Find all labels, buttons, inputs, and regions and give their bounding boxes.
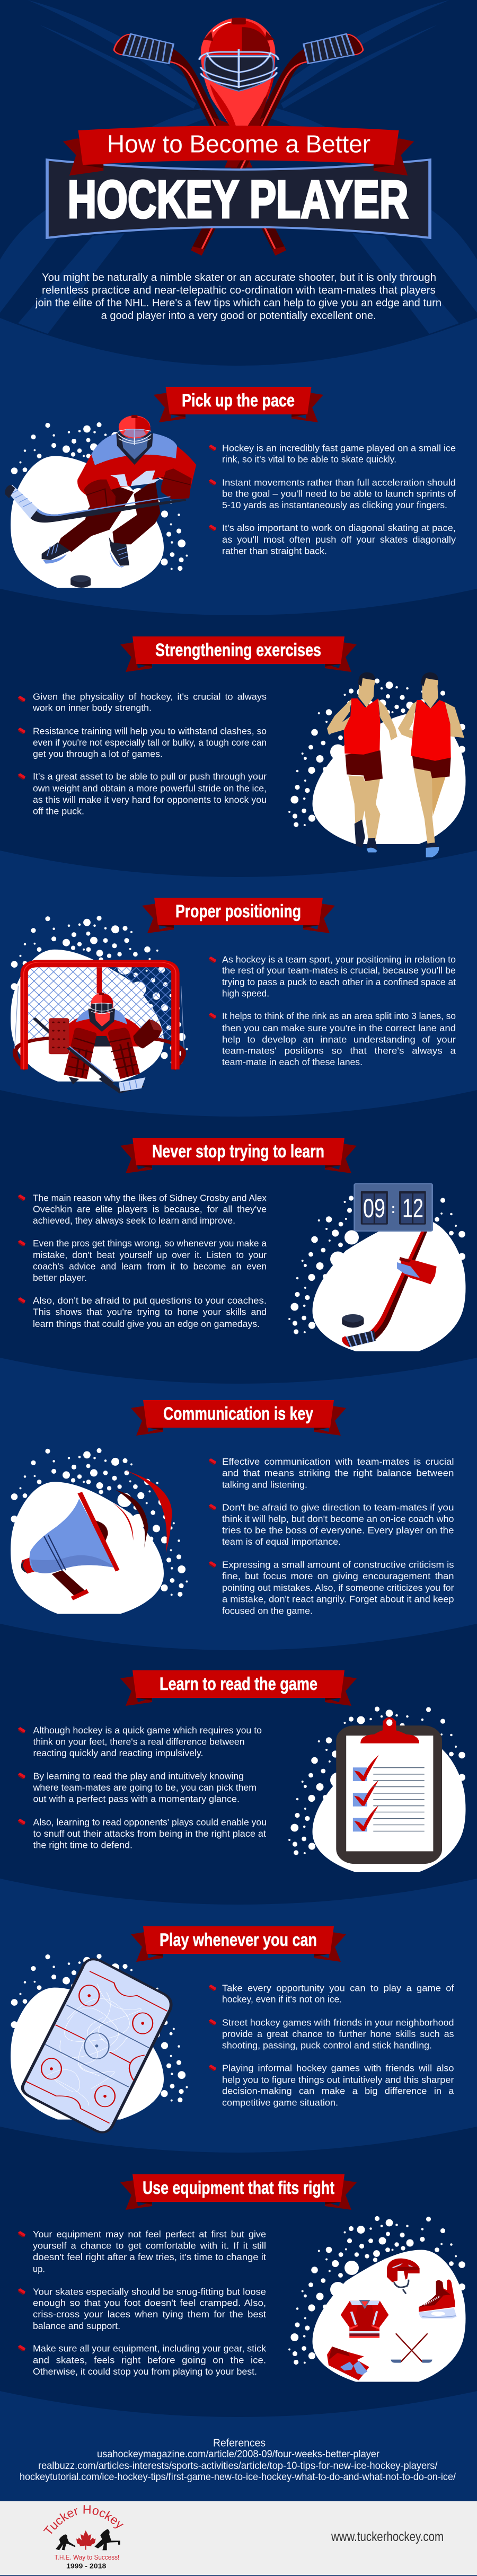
- title illustration: helmet and crossed sticks: [47, 18, 430, 255]
- text: Never stop trying to learn tips: mistake, don't beat yourself up over it. Listen to your: [33, 1250, 267, 1260]
- illustration: goalie in net: [11, 916, 188, 1092]
- text: Learn to read the game tips: reacting quickly and reacting impulsively.: [33, 1748, 204, 1758]
- heading ribbon: Proper positioning: Proper positioning: [175, 901, 301, 922]
- text: Never stop trying to learn tips: Ovechkin are elite players is because, for all they've: [33, 1204, 267, 1215]
- heading ribbon: Play whenever you can: [131, 1926, 346, 1962]
- logo: Tucker Hockey: 1999 - 2018: [66, 2562, 106, 2570]
- text: Learn to read the game tips: Also, learning to read opponents' plays could enable you: [33, 1817, 267, 1827]
- text: Use equipment that fits right tips: and skates, feels right before going on the ice.: [33, 2355, 266, 2366]
- text: Communication is key tips: Don't be afraid to give direction to team-mates if you: [222, 1502, 454, 1512]
- text: Learn to read the game tips: [18, 1725, 267, 1851]
- intro paragraph: a good player into a very good or potentially excellent one.: [101, 310, 376, 322]
- text: Proper positioning tips: As hockey is a team sport, your positioning in relation to: [222, 954, 456, 964]
- references: usahockeymagazine.com/article/2008-09/four-weeks-better-player: [97, 2449, 380, 2460]
- text: Never stop trying to learn tips: coach's advice and learn from it to become an even: [33, 1261, 267, 1271]
- footer panel: [0, 2501, 477, 2575]
- illustration: hockey equipment set: [288, 2216, 465, 2382]
- title line: How to Become a Better: How to Become a Better: [107, 130, 370, 158]
- text: Communication is key tips: talking and listening.: [222, 1479, 307, 1490]
- text: Communication is key tips: and that means striking the right balance between: [222, 1468, 454, 1479]
- text: Learn to read the game tips: Although hockey is a quick game which requires you to: [33, 1725, 262, 1736]
- illustration: skating hockey player: [5, 415, 196, 588]
- text: Proper positioning tips: [209, 954, 456, 1067]
- illustration: two runners: [288, 672, 465, 857]
- text: Proper positioning tips: high speed.: [222, 988, 269, 999]
- text: Pick up the pace tips: rink, so it's vital to be able to skate quickly.: [222, 454, 396, 464]
- heading ribbon: Play whenever you can: Play whenever you can: [160, 1930, 317, 1950]
- text: Use equipment that fits right tips: balance and support.: [33, 2321, 120, 2331]
- text: Communication is key tips: Expressing a small amount of constructive criticism is: [222, 1559, 454, 1570]
- heading ribbon: Never stop trying to learn: [120, 1138, 357, 1173]
- text: Never stop trying to learn tips: Also, don't be afraid to put questions to your coaches.: [33, 1295, 267, 1306]
- heading ribbon: Pick up the pace: [154, 387, 323, 422]
- illustration: clipboard checklist: [288, 1706, 465, 1872]
- text: Proper positioning tips: help to develop an innate understanding of your: [222, 1034, 456, 1045]
- text: Proper positioning tips: It helps to think of the rink as an area split into 3 lanes, so: [222, 1011, 456, 1021]
- logo: Tucker Hockey: Tucker Hockey: [43, 2505, 123, 2534]
- text: Learn to read the game tips: to snuff out their attacks from being in the right place at: [33, 1828, 266, 1839]
- text: Learn to read the game tips: By learning to read the play and intuitively knowing: [33, 1771, 244, 1781]
- heading ribbon: Strengthening exercises: Strengthening exercises: [155, 640, 321, 660]
- text: Communication is key tips: fine, but focus more on giving encouragement than: [222, 1571, 454, 1581]
- text: Proper positioning tips: team-mate in each of these lanes.: [222, 1057, 363, 1067]
- heading ribbon: Communication is key: [131, 1400, 346, 1436]
- heading ribbon: Use equipment that fits right: Use equipment that fits right: [143, 2178, 334, 2198]
- text: Proper positioning tips: then you can make sure you're in the correct lane and: [222, 1023, 456, 1033]
- panel: Pick up the pace: [5, 387, 456, 588]
- text: Use equipment that fits right tips: criss-cross your laces when tying them for the best: [33, 2309, 266, 2320]
- text: Play whenever you can tips: help you to figure things out intuitively and this sharper: [222, 2074, 454, 2085]
- scoreboard digits: :: [391, 1200, 395, 1216]
- text: Use equipment that fits right tips: doesn't feel right after a few tries, it's time to change it: [33, 2252, 266, 2262]
- title dark banner panel: [47, 160, 430, 238]
- references: [20, 2437, 456, 2483]
- text: Proper positioning tips: the rest of your team-mates is crucial, because you'll be: [222, 965, 456, 976]
- panel: Communication is key: [11, 1400, 454, 1616]
- text: Never stop trying to learn tips: learn things that could give you an edge on gamedays.: [33, 1318, 260, 1329]
- text: Strengthening exercises tips: [18, 692, 267, 817]
- text: Pick up the pace tips: It's also important to work on diagonal skating at pace,: [222, 523, 456, 533]
- text: Strengthening exercises tips: off the puck.: [33, 806, 84, 817]
- text: Proper positioning tips: trying to pass a puck to each other in a confined space at: [222, 977, 456, 987]
- text: Play whenever you can tips: decision-making can make a big difference in a: [222, 2086, 454, 2096]
- heading ribbon: Proper positioning: [142, 898, 335, 933]
- references: hockeytutorial.com/ice-hockey-tips/first-game-new-to-ice-hockey-what-to-do-and-what-not-to-do-on-ice/: [20, 2472, 456, 2483]
- panel: Never stop trying to learn: [18, 1138, 465, 1351]
- heading ribbon: Never stop trying to learn: Never stop trying to learn: [152, 1141, 324, 1162]
- text: Pick up the pace tips: Instant movements rather than full acceleration should: [222, 477, 456, 488]
- heading ribbon: Communication is key: Communication is key: [163, 1404, 313, 1424]
- scoreboard digits: 12: [402, 1193, 423, 1223]
- text: Play whenever you can tips: Take every opportunity you can to play a game of: [222, 1983, 454, 1994]
- panel: Play whenever you can: [11, 1926, 454, 2132]
- text: Learn to read the game tips: where team-mates are going to be, you can pick them: [32, 1782, 257, 1793]
- text: Strengthening exercises tips: own weight and obtain a more powerful stride on the ice,: [33, 783, 267, 794]
- panel: Learn to read the game: [18, 1670, 465, 1872]
- text: Never stop trying to learn tips: This shows that you're trying to hone your skills and: [33, 1307, 267, 1317]
- text: Strengthening exercises tips: Given the physicality of hockey, it's crucial to always: [33, 692, 267, 702]
- references: realbuzz.com/articles-interests/sports-activities/article/top-10-tips-for-new-ice-hockey-players/: [38, 2460, 438, 2472]
- text: Proper positioning tips: team-mates' positions so that there's always a: [222, 1045, 456, 1056]
- heading ribbon: Pick up the pace: Pick up the pace: [182, 391, 295, 411]
- text: Use equipment that fits right tips: up.: [33, 2263, 45, 2274]
- text: Communication is key tips: team is of equal importance.: [222, 1536, 341, 1547]
- text: Play whenever you can tips: provide a great chance to further hone skills such as: [222, 2029, 454, 2039]
- text: Play whenever you can tips: [209, 1983, 454, 2108]
- text: Use equipment that fits right tips: Make sure all your equipment, including your gear, stick: [33, 2343, 266, 2354]
- heading ribbon: Learn to read the game: Learn to read the game: [160, 1674, 317, 1694]
- text: Play whenever you can tips: shooting, passing, puck control and stick handling.: [222, 2040, 432, 2051]
- text: Never stop trying to learn tips: Even the pros get things wrong, so whenever you make a: [33, 1238, 267, 1249]
- text: Never stop trying to learn tips: The main reason why the likes of Sidney Crosby and Alex: [33, 1192, 267, 1203]
- text: Use equipment that fits right tips: Your skates especially should be snug-fitting but loose: [33, 2286, 266, 2297]
- illustration: ice rink: [11, 1954, 188, 2132]
- intro paragraph: You might be naturally a nimble skater or an accurate shooter, but it is only through: [42, 272, 436, 284]
- text: Play whenever you can tips: Street hockey games with friends in your neighborhood: [222, 2017, 454, 2028]
- text: Communication is key tips: a mistake, don't react angrily. Forget about it and keep: [222, 1594, 454, 1605]
- text: Never stop trying to learn tips: achieved, they always seek to learn and improve.: [33, 1215, 235, 1226]
- text: Play whenever you can tips: competitive game situation.: [222, 2097, 338, 2108]
- text: Communication is key tips: think it will help, but don't become an on-ice coach who: [222, 1513, 454, 1524]
- heading ribbon: Use equipment that fits right: [120, 2174, 357, 2210]
- website address: www.tuckerhockey.com: [331, 2529, 444, 2544]
- text: Strengthening exercises tips: even if you're not especially tall or bulky, a tough core can: [33, 737, 267, 748]
- scoreboard digits: [363, 1193, 423, 1223]
- icon: right hockey stick: [191, 34, 363, 255]
- heading ribbon: Learn to read the game: [120, 1670, 357, 1706]
- text: Use equipment that fits right tips: Your equipment may not feel perfect at first but give: [33, 2229, 266, 2239]
- text: Use equipment that fits right tips: yourself a chance to get comfortable with it. If it still: [33, 2241, 266, 2251]
- text: Strengthening exercises tips: as this will make it very hard for opponents to knock you: [33, 794, 267, 805]
- text: Play whenever you can tips: Playing informal hockey games with friends will also: [222, 2063, 454, 2074]
- text: Play whenever you can tips: hockey, even if it's not on ice.: [222, 1994, 342, 2004]
- text: Communication is key tips: Effective communication with team-mates is crucial: [222, 1456, 454, 1467]
- text: Pick up the pace tips: rather than straight back.: [222, 546, 327, 556]
- text: Use equipment that fits right tips: enough so that you foot doesn't feel cramped. Also,: [33, 2298, 266, 2308]
- logo: Tucker Hockey: T.H.E. Way to Success!: [55, 2553, 119, 2561]
- alternating section bands: [0, 589, 477, 2417]
- text: Pick up the pace tips: [209, 442, 456, 556]
- text: Pick up the pace tips: be the goal – you'll need to be able to launch sprints of: [222, 489, 456, 499]
- panel: Use equipment that fits right: [18, 2174, 465, 2382]
- panel: Strengthening exercises: [18, 636, 465, 857]
- header backdrop arcs: [0, 0, 477, 334]
- text: Communication is key tips: focused on the game.: [222, 1605, 313, 1616]
- text: Never stop trying to learn tips: [18, 1192, 267, 1329]
- text: Learn to read the game tips: the right time to defend.: [33, 1840, 132, 1851]
- text: Strengthening exercises tips: It's a great asset to be able to pull or push through your: [33, 771, 267, 782]
- text: Use equipment that fits right tips: [18, 2229, 266, 2377]
- text: Learn to read the game tips: think on your feet, there's a real difference between: [33, 1737, 245, 1747]
- dark top band with header backdrop: [0, 0, 477, 366]
- text: Learn to read the game tips: out with a perfect pass with a momentary glance.: [33, 1793, 240, 1804]
- intro paragraph: relentless practice and near-telepathic co-ordination with team-mates that players: [42, 285, 436, 296]
- title red ribbon: [63, 126, 414, 175]
- icon: goalie helmet: [199, 18, 278, 126]
- text: Pick up the pace tips: 5-10 yards as instantaneously as clicking your fingers.: [222, 500, 447, 510]
- text: Strengthening exercises tips: work on inner body strength.: [32, 703, 152, 713]
- intro paragraph: [35, 272, 441, 322]
- text: Communication is key tips: pointing out mistakes. Also, if someone criticizes you for: [222, 1582, 454, 1593]
- icon: left hockey stick: [114, 34, 286, 255]
- heading ribbon: Strengthening exercises: [120, 636, 357, 672]
- text: Pick up the pace tips: as you'll most often push off your skates diagonally: [222, 534, 456, 545]
- logo: Tucker Hockey: [43, 2505, 123, 2570]
- illustration: megaphone: [11, 1448, 188, 1614]
- intro paragraph: join the elite of the NHL. Here's a few tips which can help to give you an edge and turn: [35, 297, 441, 309]
- text: Pick up the pace tips: Hockey is an incredibly fast game played on a small ice: [222, 442, 456, 453]
- text: Communication is key tips: tries to be the boss of everyone. Every player on the: [222, 1525, 454, 1536]
- references: References: [213, 2437, 266, 2449]
- text: Never stop trying to learn tips: better player.: [33, 1272, 87, 1283]
- text: Strengthening exercises tips: get you through a lot of games.: [33, 749, 163, 759]
- panel: Proper positioning: [11, 898, 456, 1092]
- text: Strengthening exercises tips: Resistance training will help you to withstand clashes, so: [33, 726, 267, 737]
- illustration: scoreboard, stick, glove and puck: [288, 1184, 465, 1351]
- scoreboard digits: 09: [363, 1193, 385, 1223]
- text: Communication is key tips: [209, 1456, 454, 1616]
- text: Use equipment that fits right tips: Otherwise, it could stop you from playing to your best.: [33, 2366, 257, 2377]
